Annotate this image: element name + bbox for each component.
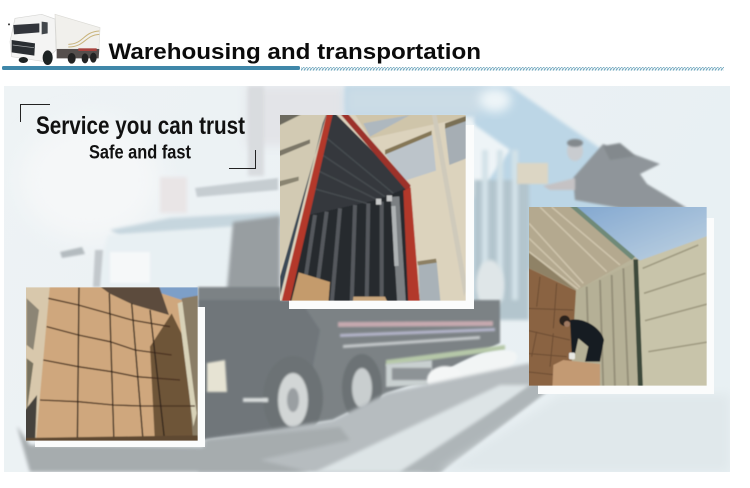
subtitle: Safe and fast: Safe and fast: [89, 142, 192, 164]
white offset backing: [538, 218, 714, 394]
callout: service tagline: [20, 104, 256, 168]
white offset backing: [289, 125, 474, 309]
photo: worker and open doors: [526, 204, 710, 389]
flying courier figure: [517, 139, 687, 208]
photo: red container door and building: [277, 112, 469, 304]
sky and trailer top: [246, 86, 640, 320]
photo: cartons stacked in container: [23, 284, 201, 444]
bracket top left: [20, 104, 50, 122]
truck wheels and lamp: [206, 354, 382, 428]
heading rule: [2, 66, 724, 70]
ground shadow and road: [16, 362, 616, 472]
photo frame: worker loading container: [526, 204, 714, 394]
tagline: Service you can trust: Service you can trust: [36, 112, 246, 140]
white offset backing: [35, 307, 205, 447]
heading: Warehousing and transportation: Warehousing and transportation: [108, 39, 481, 64]
panel: blurred truck background: [4, 86, 730, 472]
icon: white truck: [8, 14, 100, 65]
trailer side stripes: [336, 320, 515, 388]
truck cab body: [198, 287, 500, 440]
truck cab windshield and roof: [60, 177, 280, 300]
photo frame: open container: [277, 112, 474, 309]
photo frame: stacked cartons: [23, 284, 205, 447]
bracket bottom right: [229, 150, 256, 168]
